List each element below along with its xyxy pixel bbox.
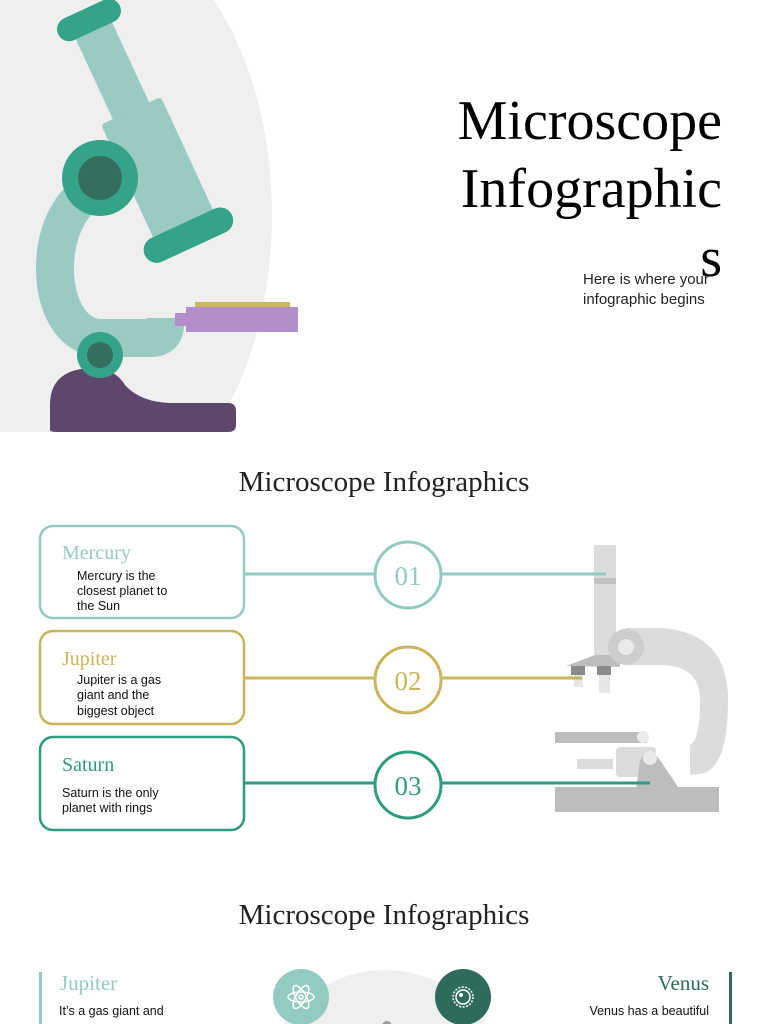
- connector lines: [244, 574, 650, 783]
- bottom left: Jupiter: Jupiter: [60, 971, 117, 995]
- subtitle: infographic begins: [583, 291, 705, 308]
- hero microscope illustration: [40, 0, 298, 432]
- item 01: Mercury: Mercury: [62, 542, 131, 564]
- subtitle: [583, 271, 709, 308]
- grey microscope illustration: [555, 545, 728, 812]
- hero background blob: [0, 0, 272, 432]
- item 01: Mercury: the Sun: [77, 599, 120, 613]
- item 03: Saturn: 03: [394, 771, 422, 801]
- item 03: Saturn: Saturn is the only: [62, 786, 159, 800]
- item 02: Jupiter: biggest object: [77, 704, 155, 718]
- title: [458, 90, 722, 289]
- bottom right: Venus: Venus: [658, 971, 709, 995]
- icon: atom: [273, 969, 329, 1024]
- subtitle: Here is where your: [583, 271, 709, 288]
- title: s: [700, 227, 722, 289]
- item 03: Saturn: planet with rings: [62, 801, 152, 815]
- bottom center background circle: [263, 970, 507, 1024]
- title: Microscope: [458, 90, 722, 152]
- item 03: Saturn: Saturn: [62, 754, 114, 776]
- item 01: Mercury: [40, 526, 441, 618]
- icon: cell: [435, 969, 491, 1024]
- item 02: Jupiter: giant and the: [77, 688, 149, 702]
- item 01: Mercury: 01: [394, 561, 422, 591]
- item 02: Jupiter: Jupiter: [62, 648, 117, 670]
- bottom right: Venus: Venus has a beautiful: [589, 1004, 709, 1018]
- title: Infographic: [461, 158, 722, 220]
- item 02: Jupiter: [40, 631, 441, 724]
- bottom left: Jupiter: It’s a gas giant and: [59, 1004, 164, 1018]
- bottom right: Venus: [589, 971, 732, 1024]
- item 01: Mercury: Mercury is the: [77, 569, 156, 583]
- section heading 3: Microscope Infographics: [239, 899, 529, 931]
- item 02: Jupiter: Jupiter is a gas: [77, 673, 161, 687]
- bottom left: Jupiter: [39, 971, 164, 1024]
- item 02: Jupiter: 02: [394, 666, 422, 696]
- item 03: Saturn: [40, 737, 441, 830]
- section heading 2: Microscope Infographics: [239, 466, 529, 498]
- item 01: Mercury: closest planet to: [77, 584, 167, 598]
